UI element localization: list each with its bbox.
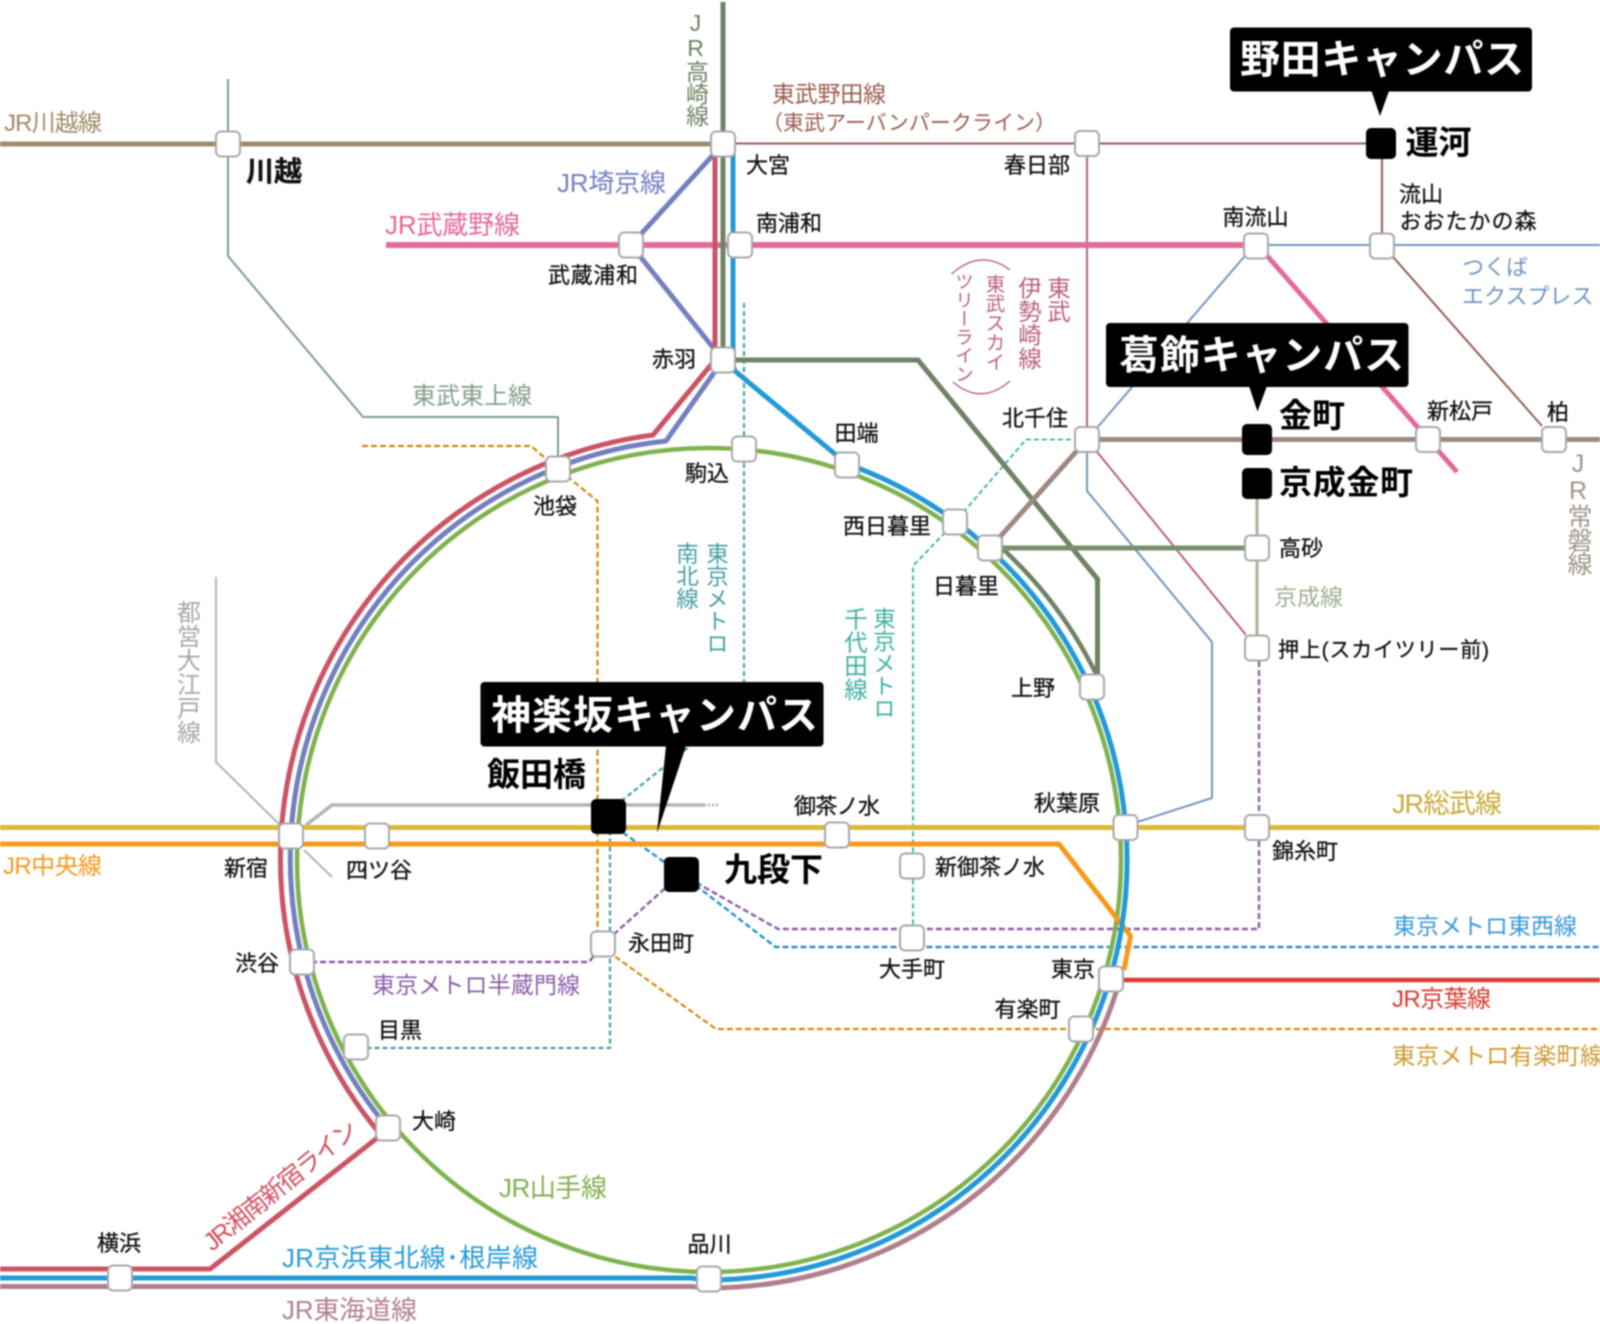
campus callout: Kagurazaka: 神楽坂キャンパス	[491, 694, 818, 738]
line label: Toei Oedo: 都営大江戸線	[172, 600, 200, 744]
line label: JR Keihin-Tohoku and Negishi: JR京浜東北線･根岸線	[282, 1243, 538, 1273]
station: Kawagoe: 川越	[246, 156, 302, 187]
station: Komagome: 駒込	[685, 461, 729, 486]
station: Nagareyama-Otakanomori: おおたかの森	[1400, 209, 1536, 234]
line: Hanzomon	[302, 648, 1259, 962]
line: JR Yamanote	[297, 448, 1121, 1272]
campus station: Kudanshita	[664, 851, 823, 892]
line label: Tokyo Metro Chiyoda: 千代田線	[841, 607, 868, 701]
line: JR Keiyo	[1111, 978, 1600, 982]
station: Nagareyama-Otakanomori	[1370, 182, 1536, 258]
line: JR Saikyo	[290, 144, 723, 1128]
station: Shibuya: 渋谷	[235, 951, 279, 976]
station: Komagome	[685, 436, 756, 486]
line: Yurakucho	[362, 446, 1600, 1029]
line: JR Tokaido	[0, 982, 1119, 1288]
campus callout: Noda: 野田キャンパス	[1240, 38, 1524, 82]
station: Minami-Urawa	[728, 211, 822, 258]
station: Akihabara: 秋葉原	[1034, 791, 1100, 816]
station: Takasago	[1245, 536, 1323, 561]
campus callout: Katsushika: 葛飾キャンパス	[1119, 334, 1404, 378]
line label: Tobu Isesaki and Skytree: 伊勢崎線	[1015, 276, 1042, 370]
station: Kita-Senju	[1002, 406, 1099, 452]
station: Yurakucho	[994, 997, 1093, 1042]
station: Nagareyama-Otakanomori: 流山	[1399, 182, 1443, 207]
station: Kashiwa	[1542, 400, 1569, 452]
campus station: Iidabashi	[487, 756, 626, 834]
station: Ikebukuro	[533, 456, 577, 519]
line label: Tsukuba Express: エクスプレス	[1462, 284, 1593, 309]
line: Chiyoda	[913, 440, 1087, 938]
station: Omiya: 大宮	[746, 153, 790, 178]
line label: JR Sobu: JR総武線	[1392, 789, 1502, 819]
station: Nagatacho	[591, 931, 694, 956]
line: JR Chuo	[0, 844, 1131, 970]
station: Shin-Ochanomizu: 新御茶ノ水	[935, 855, 1045, 880]
line label: JR Yamanote: JR山手線	[499, 1173, 607, 1203]
station: Shinagawa: 品川	[688, 1232, 732, 1257]
line label: JR Joban: JR常磐線	[1564, 450, 1592, 576]
station: Akihabara	[1034, 791, 1138, 840]
station: Shin-Matsudo	[1416, 399, 1493, 452]
station: Shinagawa	[688, 1232, 732, 1292]
station: Kinshicho	[1245, 815, 1338, 864]
station: Kashiwa: 柏	[1547, 400, 1569, 425]
line: JR Shonan-Shinjuku	[0, 144, 715, 1269]
line label: Tsukuba Express: つくば	[1462, 255, 1528, 280]
station: Tabata: 田端	[834, 421, 879, 446]
line: Tobu Noda	[723, 144, 1542, 426]
station: Yokohama: 横浜	[97, 1231, 141, 1256]
line: Tsukuba Express	[1087, 245, 1600, 826]
line label: Tokyo Metro Hanzomon: 東京メトロ半蔵門線	[372, 972, 580, 998]
campus station: Kanamachi: 金町	[1279, 397, 1345, 434]
station: Otemachi: 大手町	[879, 957, 945, 982]
line label: Tokyo Metro Namboku: 東京メトロ	[704, 542, 729, 654]
station: Nippori	[933, 536, 1002, 599]
campus station: Iidabashi: 飯田橋	[487, 756, 586, 793]
campus station: Unga	[1366, 124, 1472, 161]
line label: JR Shonan-Shinjuku: JR湘南新宿ライン	[198, 1115, 363, 1257]
line label: Tokyo Metro Chiyoda: 東京メトロ	[870, 607, 896, 720]
line label: Keisei: 京成線	[1274, 584, 1343, 610]
station: Tokyo: 東京	[1051, 957, 1095, 982]
line: JR Sobu	[0, 825, 1600, 830]
station: Ueno: 上野	[1011, 676, 1055, 701]
station: Kasukabe: 春日部	[1004, 153, 1070, 178]
station: Osaki: 大崎	[412, 1109, 456, 1134]
station: Tokyo	[1051, 957, 1123, 992]
line label: Tokyo Metro Yurakucho: 東京メトロ有楽町線	[1392, 1043, 1600, 1069]
station: Nagatacho: 永田町	[628, 931, 694, 956]
station: Shinjuku	[224, 824, 303, 881]
station: Minami-Urawa: 南浦和	[756, 211, 822, 236]
station: Kita-Senju: 北千住	[1002, 406, 1068, 431]
line label: Tobu Isesaki and Skytree: 東武スカイ	[982, 274, 1005, 372]
line: JR Joban	[990, 440, 1600, 548]
station: Minami-Nagareyama: 南流山	[1222, 205, 1289, 230]
station: Ochanomizu: 御茶ノ水	[794, 794, 880, 819]
line: Tobu Isesaki	[1087, 144, 1246, 635]
station: Tabata	[834, 421, 879, 478]
line label: JR Takasaki: JR高崎線	[682, 10, 709, 127]
line label: JR Chuo: JR中央線	[3, 853, 102, 880]
station: Oshiage: 押上(スカイツリー前)	[1278, 639, 1489, 662]
line: JR Kawagoe	[0, 142, 723, 146]
station: Kasukabe	[1004, 131, 1099, 178]
line label: JR Saikyo: JR埼京線	[557, 168, 666, 198]
line: JR Takasaki	[723, 2, 1099, 680]
line label: Tokyo Metro Chiyoda	[841, 607, 896, 720]
station: Shin-Matsudo: 新松戸	[1427, 399, 1493, 424]
line label: Tokyo Metro Namboku	[674, 542, 729, 654]
station: Ikebukuro: 池袋	[533, 494, 577, 519]
line label: Tobu Noda: 東武野田線	[772, 81, 886, 107]
station: Akabane: 赤羽	[652, 347, 696, 372]
station: Musashi-Urawa: 武蔵浦和	[548, 263, 638, 288]
station: Takasago: 高砂	[1279, 536, 1323, 561]
line: JR Musashino	[386, 245, 1457, 472]
line label: JR Kawagoe: JR川越線	[4, 110, 102, 137]
station: Kawagoe	[216, 132, 302, 187]
station: Nishi-Nippori: 西日暮里	[843, 514, 931, 539]
station: Akabane	[652, 347, 735, 372]
line label: Tobu Urban Park: （東武アーバンパークライン）	[762, 112, 1056, 135]
line: Tozai	[608, 822, 1600, 947]
campus callout: Kagurazaka	[480, 682, 824, 833]
station: Omiya	[711, 132, 790, 178]
line label: Tobu Tojo: 東武東上線	[412, 383, 532, 410]
line: Tobu Tojo	[228, 79, 558, 469]
station: Nippori: 日暮里	[933, 574, 999, 599]
station: Yokohama	[97, 1231, 141, 1290]
line label: Tobu Isesaki and Skytree	[952, 260, 1071, 394]
line: Namboku	[356, 303, 744, 1048]
line: Toei Oedo	[216, 577, 720, 877]
line label: Tobu Isesaki and Skytree: ツリーライン	[954, 272, 974, 383]
station: Shinjuku: 新宿	[224, 856, 268, 881]
campus station: Kudanshita: 九段下	[724, 851, 823, 888]
line label: JR Musashino: JR武蔵野線	[385, 210, 520, 240]
station: Yurakucho: 有楽町	[994, 997, 1061, 1022]
campus station: Keisei-Kanamachi: 京成金町	[1279, 464, 1413, 501]
line label: Tokyo Metro Namboku: 南北線	[674, 542, 699, 610]
line label: JR Keiyo: JR京葉線	[1392, 986, 1491, 1013]
station: Osaki	[376, 1109, 456, 1140]
station: Ueno	[1011, 674, 1104, 701]
campus station: Kanamachi	[1242, 397, 1345, 455]
station: Yotsuya: 四ツ谷	[346, 858, 412, 883]
station: Yotsuya	[346, 824, 412, 883]
station: Musashi-Urawa	[548, 232, 643, 288]
line: JR Keihin-Tohoku	[0, 144, 1127, 1280]
campus callout: Katsushika	[1106, 323, 1408, 412]
station: Otemachi	[879, 926, 945, 982]
campus station: Unga: 運河	[1406, 124, 1472, 161]
station: Nishi-Nippori	[843, 510, 967, 539]
station: Minami-Nagareyama	[1222, 205, 1289, 258]
line label: Tsukuba Express	[1462, 255, 1593, 309]
line label: Tokyo Metro Tozai: 東京メトロ東西線	[1393, 913, 1577, 939]
station: Meguro: 目黒	[378, 1018, 422, 1043]
station: Kinshicho: 錦糸町	[1272, 839, 1338, 864]
station: Ochanomizu	[794, 794, 880, 848]
campus callout: Noda	[1230, 28, 1532, 116]
station: Shibuya	[235, 950, 314, 976]
line: Keisei	[990, 483, 1257, 648]
station: Meguro	[344, 1018, 422, 1060]
line label: Tobu Isesaki and Skytree: 東武	[1044, 276, 1071, 323]
